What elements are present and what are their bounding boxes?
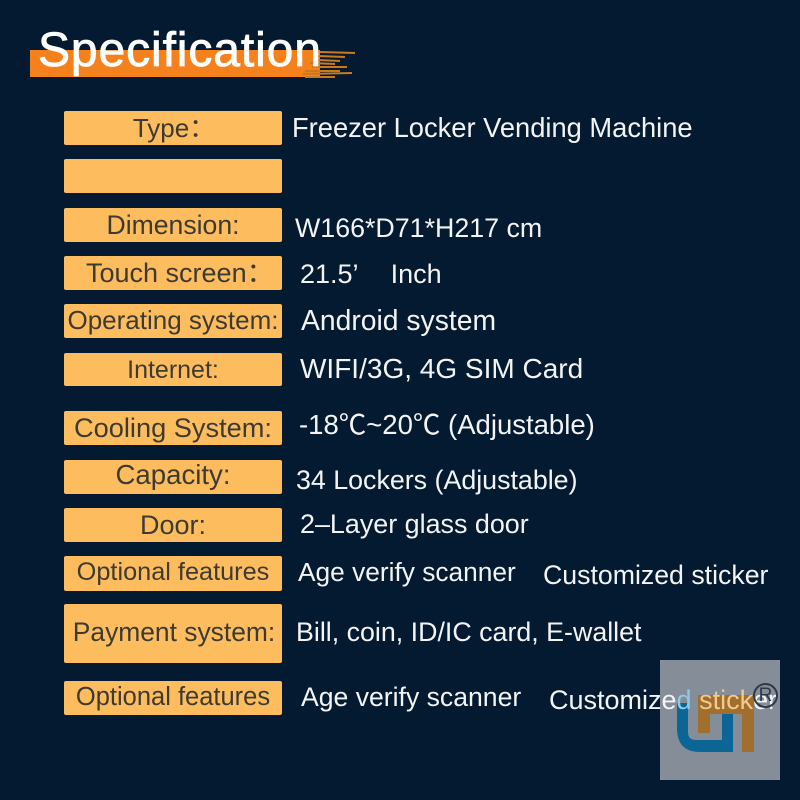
icon: brown logo stroke (698, 695, 754, 752)
row: type label: Type： (133, 113, 215, 143)
row: door label (64, 508, 282, 542)
row: internet value: WIFI/3G, 4G SIM Card (300, 353, 583, 384)
row: optional features label 2: Optional features (76, 683, 270, 711)
row: touch screen label: Touch screen： (86, 258, 274, 288)
row: payment system value: Bill, coin, ID/IC card, E-wallet (296, 617, 641, 647)
row: capacity label: Capacity: (115, 459, 231, 490)
row: capacity value: 34 Lockers (Adjustable) (296, 465, 578, 495)
watermark: logo panel (660, 660, 780, 780)
row: optional features value 2: Customized sticker (543, 560, 768, 590)
row: optional features label: Optional features (77, 558, 269, 586)
row: cooling system value: -18℃~20℃ (Adjustable) (299, 409, 595, 440)
row: internet label: Internet: (127, 356, 219, 384)
icon: registered mark: R (759, 685, 772, 706)
title: Specification with orange brush stroke: Specification (38, 24, 322, 77)
row: type value: Freezer Locker Vending Machine (292, 112, 693, 143)
row: optional features value 4: Customized sticker (549, 685, 777, 715)
row: dimension value: W166*D71*H217 cm (295, 213, 542, 243)
row: payment system label (64, 604, 282, 663)
row: door value: 2–Layer glass door (300, 509, 529, 539)
row: optional features value 3: Age verify scanner (301, 682, 521, 712)
row: capacity label (64, 460, 282, 494)
row: payment system label: Payment system: (73, 617, 275, 647)
row: touch screen value: 21.5’ Inch (300, 259, 442, 289)
row: operating system label: Operating system: (68, 305, 278, 335)
row: optional features value 1: Age verify scanner (298, 557, 516, 587)
row: dimension label (64, 208, 282, 242)
row: dimension label: Dimension: (106, 210, 240, 240)
icon: registered mark (753, 683, 778, 708)
row: internet label (64, 353, 282, 386)
row: door label: Door: (140, 510, 206, 540)
row: operating system value: Android system (301, 304, 496, 336)
row: type label (64, 111, 282, 145)
row: blank label (64, 159, 282, 193)
row: cooling system label: Cooling System: (74, 412, 272, 443)
icon: blue logo stroke (677, 703, 733, 752)
